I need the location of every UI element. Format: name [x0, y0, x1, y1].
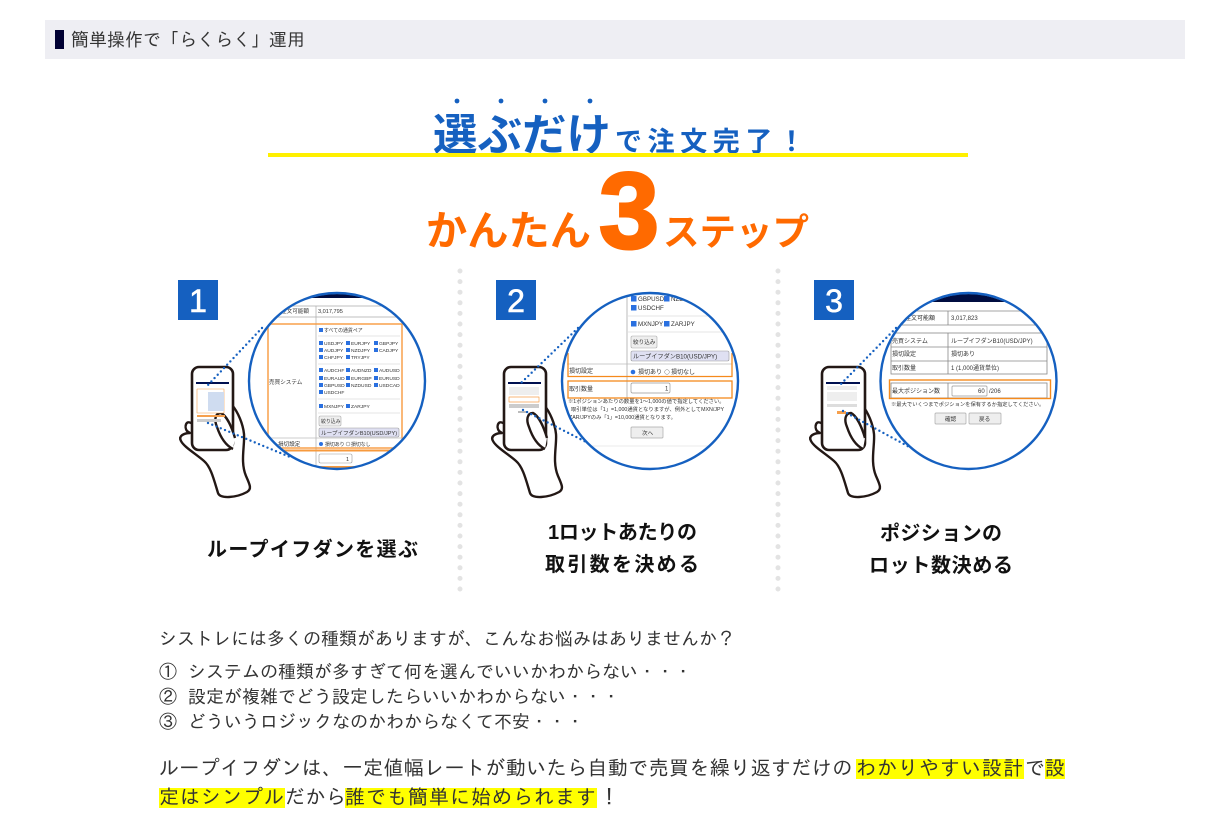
magnified screen: lot size: ZARJPY: [671, 321, 695, 328]
magnified screen: lot size: 損切なし: [671, 368, 695, 376]
worry 2: ②: [159, 687, 177, 707]
magnified screen: lot size: GBPUSD: [638, 296, 665, 303]
magnified screen: pair selection: [240, 290, 430, 470]
text: dakara: だから: [285, 787, 346, 809]
zoom dotted lines: [521, 328, 596, 447]
summary paragraph: [159, 758, 1065, 809]
magnified screen: lot size: ZAR/JPYのみ「1」=10,000通貨となります。: [569, 413, 676, 421]
text: de: で: [1025, 758, 1045, 780]
magnified screen: lot size: MXNJPY: [638, 321, 663, 328]
magnified screen: position count: 戻る: [979, 416, 990, 423]
step 1: [178, 280, 430, 561]
magnified screen: pair selection: AUDCHF: [324, 368, 344, 374]
magnified screen: lot size: 次へ: [642, 429, 654, 437]
icon: hand holding phone: [810, 367, 880, 497]
yellow underline: [268, 153, 968, 157]
highlight: simple: 定はシンプル: [159, 787, 285, 809]
title: easy 3 steps: ステップ: [663, 212, 809, 253]
step number 2: 2: [507, 283, 525, 319]
magnified screen: position count: ※最大でいくつまでポジションを保有するか指定してください。: [891, 400, 1044, 408]
magnified screen: pair selection: EURGBP: [351, 376, 372, 382]
mini screen: [826, 382, 860, 414]
mini screen: [196, 382, 229, 422]
magnified screen: position count: ループイフダンB10(USD/JPY): [951, 337, 1033, 345]
magnified screen: pair selection: 絞り込み: [321, 418, 341, 425]
magnified screen: pair selection: EURUSD: [379, 376, 400, 382]
magnified screen: position count: 損切あり: [951, 350, 975, 358]
worry 2: 設定が複雑でどう設定したらいいかわからない・・・: [188, 687, 620, 707]
magnified screen: position count: 売買システム: [892, 337, 928, 345]
magnified screen: pair selection: 損切なし: [351, 441, 371, 448]
title: easy 3 steps: 3: [599, 150, 659, 271]
icon: hand holding phone: [180, 367, 250, 497]
magnified screen: pair selection: TRYJPY: [351, 355, 370, 361]
magnified screen: pair selection: USDCAD: [379, 383, 400, 389]
step 3 caption: ロット数決める: [869, 554, 1013, 577]
magnified screen: pair selection: USDJPY: [324, 341, 344, 347]
magnified screen: lot size: 1: [665, 386, 669, 392]
step 3 caption: [869, 522, 1013, 577]
magnified screen: pair selection: ループイフダンB10(USD/JPY): [321, 429, 397, 437]
magnified screen: pair selection: 損切あり: [325, 441, 345, 448]
magnified screen: pair selection: AUDUSD: [379, 368, 400, 374]
step number 3: [814, 280, 854, 320]
magnified screen: pair selection: EURAUD: [324, 376, 345, 382]
magnified screen: lot size: ループイフダンB10(USD/JPY): [633, 352, 717, 360]
magnified screen: pair selection: 損切設定: [278, 440, 301, 448]
magnified screen: pair selection: NZDJPY: [351, 348, 371, 354]
worry list: [159, 662, 692, 732]
magnified screen: position count: 確認: [945, 415, 957, 423]
title: easy 3 steps: [426, 150, 809, 271]
magnified screen: lot size: 取引数量: [569, 385, 593, 393]
magnified screen: pair selection: USDCHF: [324, 390, 344, 396]
summary line 1: ループイフダンは、一定値幅レートが動いたら自動で売買を繰り返すだけの: [159, 758, 853, 780]
magnified screen: pair selection: 3,017,795: [318, 309, 343, 315]
magnified screen: pair selection: EURJPY: [351, 341, 371, 347]
emphasis dots: [455, 99, 592, 103]
highlight: setting: 設: [1045, 758, 1065, 780]
magnified screen: pair selection: NZDUSD: [351, 383, 372, 389]
title: easy 3 steps: かんたん: [426, 208, 591, 254]
intro question: シストレには多くの種類がありますが、こんなお悩みはありませんか？: [159, 629, 735, 649]
text: exclamation: ！: [599, 787, 619, 809]
checkbox blocks: [319, 328, 378, 408]
magnified screen: lot size: 絞り込み: [633, 338, 656, 346]
magnified screen: position count: 60: [978, 389, 985, 395]
magnified screen: lot size: NZDUSD: [671, 296, 697, 303]
worry 1: システムの種類が多すぎて何を選んでいいかわからない・・・: [188, 662, 692, 682]
step 3: [810, 280, 1060, 577]
magnified screen: pair selection: CADJPY: [379, 348, 399, 354]
magnified screen: position count: [880, 290, 1060, 469]
magnified screen: lot size: ※1ポジションあたりの数量を1～1,000の値で指定してください。: [568, 397, 725, 405]
infographic: three steps: [178, 98, 1058, 592]
step 2 caption: 取引数を決める: [545, 553, 699, 576]
step number 1: 1: [189, 283, 207, 319]
heading text: 簡単操作で「らくらく」運用: [71, 30, 305, 50]
worry 1: ①: [159, 662, 177, 682]
title: select only: [433, 99, 805, 160]
step 2 caption: 1ロットあたりの: [548, 521, 697, 544]
step number 1: [178, 280, 218, 320]
magnified screen: pair selection: GBPUSD: [324, 383, 345, 389]
zoom dotted lines: [208, 328, 290, 457]
zoom dotted lines: [840, 328, 913, 449]
step 2: [492, 280, 738, 576]
magnified screen: lot size: [562, 290, 738, 469]
dotted separators: [460, 271, 778, 590]
highlight: anyone can start: 誰でも簡単に始められます: [345, 787, 597, 809]
magnified screen: position count: /206: [989, 389, 1001, 395]
magnified screen: lot size: USDCHF: [638, 305, 664, 312]
magnified screen: position count: 取引数量: [892, 364, 916, 372]
magnified screen: position count: 注文可能額: [905, 314, 935, 322]
magnified screen: position count: 損切設定: [892, 350, 916, 358]
step number 2: [496, 280, 536, 320]
magnified screen: pair selection: 注文可能額: [281, 307, 309, 315]
highlight: easy design: わかりやすい設計: [856, 758, 1024, 780]
magnified screen: position count: 1 (1,000通貨単位): [951, 364, 999, 372]
magnified screen: pair selection: GBPJPY: [379, 341, 399, 347]
magnified screen: pair selection: MXNJPY: [324, 404, 345, 410]
magnified screen: pair selection: すべての通貨ペア: [324, 327, 363, 334]
mini screen: [508, 382, 541, 413]
magnified screen: pair selection: AUDJPY: [324, 348, 344, 354]
icon: hand holding phone: [492, 367, 562, 497]
step 3 caption: ポジションの: [880, 522, 1002, 545]
magnified screen: pair selection: AUDNZD: [351, 368, 372, 374]
heading marker: [55, 30, 64, 49]
magnified screen: pair selection: CHFJPY: [324, 355, 344, 361]
step 1 caption: ループイフダンを選ぶ: [207, 537, 418, 561]
magnified screen: pair selection: 1: [346, 457, 349, 463]
magnified screen: position count: 最大ポジション数: [892, 387, 940, 395]
blue sub headline: で注文完了！: [615, 127, 805, 157]
magnified screen: lot size: 損切設定: [569, 367, 593, 375]
step number 3: 3: [825, 283, 843, 319]
magnified screen: pair selection: 売買システム: [269, 378, 303, 386]
worry 3: どういうロジックなのかわからなくて不安・・・: [188, 712, 584, 732]
magnified screen: position count: 3,017,823: [951, 316, 978, 322]
magnified screen: pair selection: ZARJPY: [351, 404, 370, 410]
magnified screen: lot size: 損切あり: [638, 368, 662, 376]
magnified screen: lot size: 取引単位は「1」=1,000通貨となりますが、例外としてMXN/JPY: [571, 405, 725, 413]
section heading bar: [45, 20, 1185, 59]
step 2 caption: [545, 521, 699, 576]
worry 3: ③: [159, 712, 177, 732]
blue headline: 選ぶだけ: [433, 111, 611, 160]
